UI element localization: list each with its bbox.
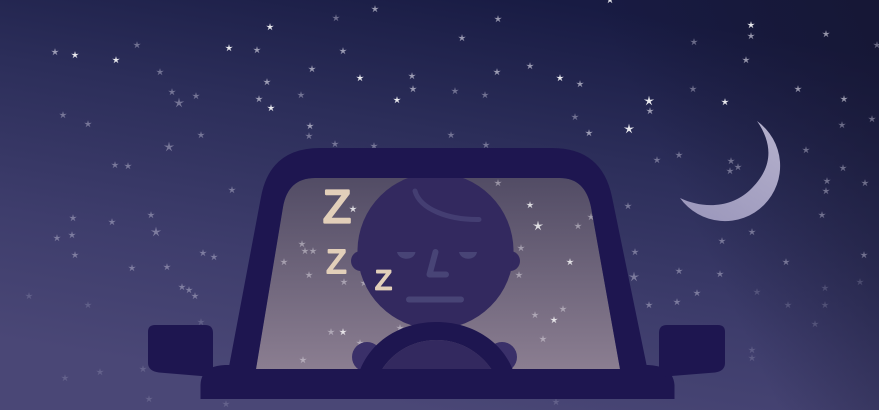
sleepy eye: left (397, 252, 416, 259)
windshield frame (228, 148, 648, 372)
star field: seen through windshield (280, 179, 595, 363)
driver ear: left (351, 251, 371, 271)
driver head (358, 173, 514, 329)
driver torso behind wheel (382, 340, 492, 370)
side mirror: right (659, 325, 725, 377)
nose (430, 252, 446, 274)
hand: left (352, 342, 382, 372)
windshield glass (256, 178, 620, 369)
mouth (409, 296, 461, 302)
driver (351, 173, 520, 372)
letter Z large: Z (323, 180, 351, 232)
side mirror: left (148, 325, 213, 377)
hair line (415, 191, 479, 220)
crescent moon (680, 121, 780, 221)
car body (200, 365, 674, 399)
sleep letters (323, 180, 392, 296)
steering wheel (360, 322, 513, 370)
hand: right (487, 342, 517, 372)
letter Z small: Z (375, 264, 392, 296)
sleepy eye: right (459, 252, 477, 259)
driver ear: right (500, 251, 520, 271)
letter Z medium: Z (326, 243, 347, 280)
